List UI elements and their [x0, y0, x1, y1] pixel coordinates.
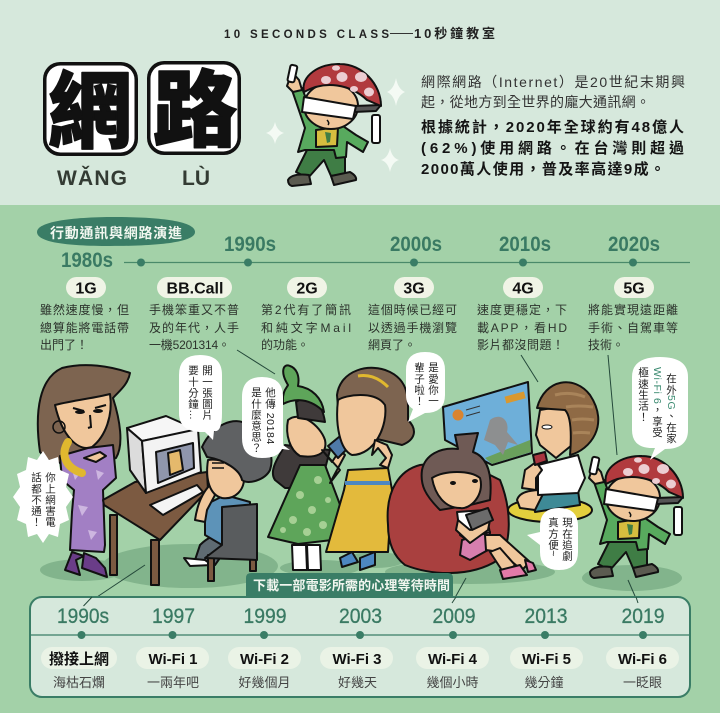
card: 1G: 總算能將電話帶: [40, 320, 129, 335]
wait-time columns: 一兩年吧: [147, 675, 199, 690]
speech bubble: 開一張圖片: [179, 355, 222, 440]
main background: [0, 205, 720, 713]
card: 1G: 1G: [75, 280, 97, 298]
speech bubble: 5G and Wi-Fi 6: Wi-Fi 6 ，享受: [651, 367, 663, 438]
title: [43, 61, 241, 159]
card: 5G: 5G: [623, 280, 645, 298]
speech bubble: starburst: 話都不通！: [30, 471, 42, 528]
wait-time columns: 2009: [432, 605, 476, 628]
series label: 10秒鐘教室: [414, 26, 495, 41]
card: BB.Call: 及的年代，人手: [149, 320, 239, 335]
wait-time columns: 1997: [152, 605, 195, 628]
intro text: 2000萬人使用，普及率高達9成。: [421, 160, 665, 178]
wait-time columns: 撥接上網: [49, 650, 109, 668]
header background: [0, 0, 720, 205]
icon: mushroom mascot: [287, 64, 381, 186]
mobile timeline: [61, 233, 690, 272]
speech bubble: 開一張圖片: 開一張圖片: [201, 365, 213, 421]
speech bubble: 是愛你一輩子啦: 是愛你一: [427, 362, 439, 406]
card: 5G: [588, 277, 678, 352]
pinyin: LÙ: [182, 166, 210, 190]
speech bubble: 20184: 是什麼意思？: [250, 387, 262, 454]
illustration: boy on cushion: [508, 382, 598, 522]
wait-time columns: 好幾個月: [238, 675, 291, 690]
panel frame: [30, 597, 690, 697]
timeline heading: 行動通訊與網路演進: [50, 225, 182, 241]
wait-time columns: Wi-Fi 2: [240, 651, 289, 668]
wait-time columns: 2003: [339, 605, 382, 628]
card: 2G: 的功能。: [261, 337, 309, 352]
mobile timeline: 2000s: [390, 233, 442, 256]
intro text: (62%)使用網路。在台灣則超過: [421, 139, 684, 157]
pinyin: [57, 166, 210, 190]
wait-time columns: [41, 605, 679, 690]
wait-time columns: Wi-Fi 1: [148, 651, 198, 668]
intro text: [421, 74, 685, 178]
illustration: man at computer: [184, 421, 272, 581]
speech bubble: 5G and Wi-Fi 6: 極速生活！: [637, 366, 649, 422]
card: BB.Call: [149, 277, 239, 352]
speech bubble: 5G and Wi-Fi 6: [632, 357, 688, 460]
wait-time columns: Wi-Fi 5: [522, 651, 571, 668]
illustration: wall screen: [443, 382, 532, 465]
intro text: 網際網路（Internet）是20世紀末期興: [421, 74, 685, 90]
series label: 10 SECONDS CLASS: [224, 29, 389, 41]
card: 3G: 3G: [403, 280, 425, 298]
wait-time columns: 幾分鐘: [524, 675, 564, 690]
card: 5G: 技術。: [588, 338, 624, 352]
speech bubble: 追劇: [527, 508, 578, 570]
speech bubble: 開一張圖片: 要十分鐘…: [187, 365, 199, 420]
card: 4G: 速度更穩定，下: [477, 302, 567, 317]
wait-time columns: Wi-Fi 3: [332, 651, 382, 668]
card: 2G: 2G: [296, 280, 318, 298]
card: 5G: 將能實現遠距離: [588, 302, 678, 317]
wait-time columns: Wi-Fi 6: [618, 651, 667, 668]
card: 3G: [368, 277, 457, 352]
mobile timeline: 2010s: [499, 233, 551, 256]
wait-time columns: 2019: [622, 605, 664, 628]
card: BB.Call: 手機笨重又不普: [149, 302, 239, 317]
panel tab: [246, 573, 453, 597]
series label: [224, 26, 495, 41]
wait-time columns: 1990s: [57, 605, 109, 628]
wait-time columns: 一眨眼: [623, 675, 662, 690]
card: 4G: 影片都沒問題！: [477, 338, 564, 352]
card: 2G: 和純文字Mail: [261, 320, 351, 335]
card: 1G: 雖然速度慢，但: [40, 302, 129, 317]
card: 3G: 這個時候已經可: [368, 302, 457, 317]
mobile timeline: 1990s: [224, 233, 276, 256]
intro text: 根據統計，2020年全球約有48億人: [421, 118, 684, 136]
speech bubble: starburst: 你上網害電: [44, 471, 56, 528]
card: 1G: [40, 277, 129, 352]
panel: download wait times: [30, 573, 690, 697]
icon: sparkles: [266, 78, 405, 172]
mobile timeline: 2020s: [608, 233, 660, 256]
panel tab: 下載一部電影所需的心理等待時間: [253, 578, 450, 593]
card: 5G: 手術、自駕車等: [588, 320, 678, 335]
card: 2G: [261, 277, 351, 352]
card: 2G: 第2代有了簡訊: [261, 302, 351, 317]
wait-time columns: 2013: [524, 605, 568, 628]
speech bubble: starburst: [13, 451, 73, 543]
speech bubble: 追劇: 現在追劇: [561, 517, 573, 562]
card: 3G: 網頁了。: [368, 338, 416, 352]
illustration: desk and computer: [103, 416, 208, 585]
title: 網: [48, 65, 132, 159]
card: 4G: [477, 277, 567, 352]
illustration: girl on beanbag: [388, 433, 536, 579]
illustration: mushroom mascot with phone: [589, 456, 683, 578]
ground shadows: [40, 544, 682, 591]
card: 3G: 以透過手機瀏覽: [368, 320, 457, 335]
connector lines: [84, 350, 638, 606]
illustration: girl in polka-dot dress: [268, 365, 352, 570]
wait-time columns: 好幾天: [338, 675, 377, 690]
card: 4G: 載APP，看HD: [477, 321, 567, 335]
title: 路: [153, 64, 237, 158]
intro text: 起，從地方到全世界的龐大通訊網。: [421, 94, 650, 110]
speech bubble: 追劇: 真方便~: [547, 516, 559, 557]
illustration: woman on the phone: [38, 365, 130, 577]
wait-time columns: Wi-Fi 4: [428, 651, 478, 668]
timeline heading: [37, 217, 195, 246]
speech bubble: 20184: [242, 377, 290, 458]
pinyin: WǍNG: [57, 166, 127, 190]
illustration: woman in yellow dress: [326, 368, 414, 570]
card: 4G: 4G: [512, 280, 534, 298]
speech bubble: 5G and Wi-Fi 6: 在外 5G 、在家: [665, 373, 677, 444]
speech bubble: 20184: 他傳 20184: [264, 386, 276, 445]
speech bubble: 是愛你一輩子啦: 輩子啦！: [413, 361, 425, 406]
wait-time columns: 幾個小時: [426, 675, 479, 690]
mobile timeline: 1980s: [61, 249, 113, 272]
wait-time columns: 1999: [244, 605, 286, 628]
card: BB.Call: BB.Call: [167, 280, 223, 298]
card: BB.Call: 一機5201314。: [149, 337, 230, 352]
card: 1G: 出門了！: [40, 338, 88, 352]
wait-time columns: 海枯石爛: [53, 675, 105, 690]
speech bubble: 是愛你一輩子啦: [406, 352, 445, 422]
